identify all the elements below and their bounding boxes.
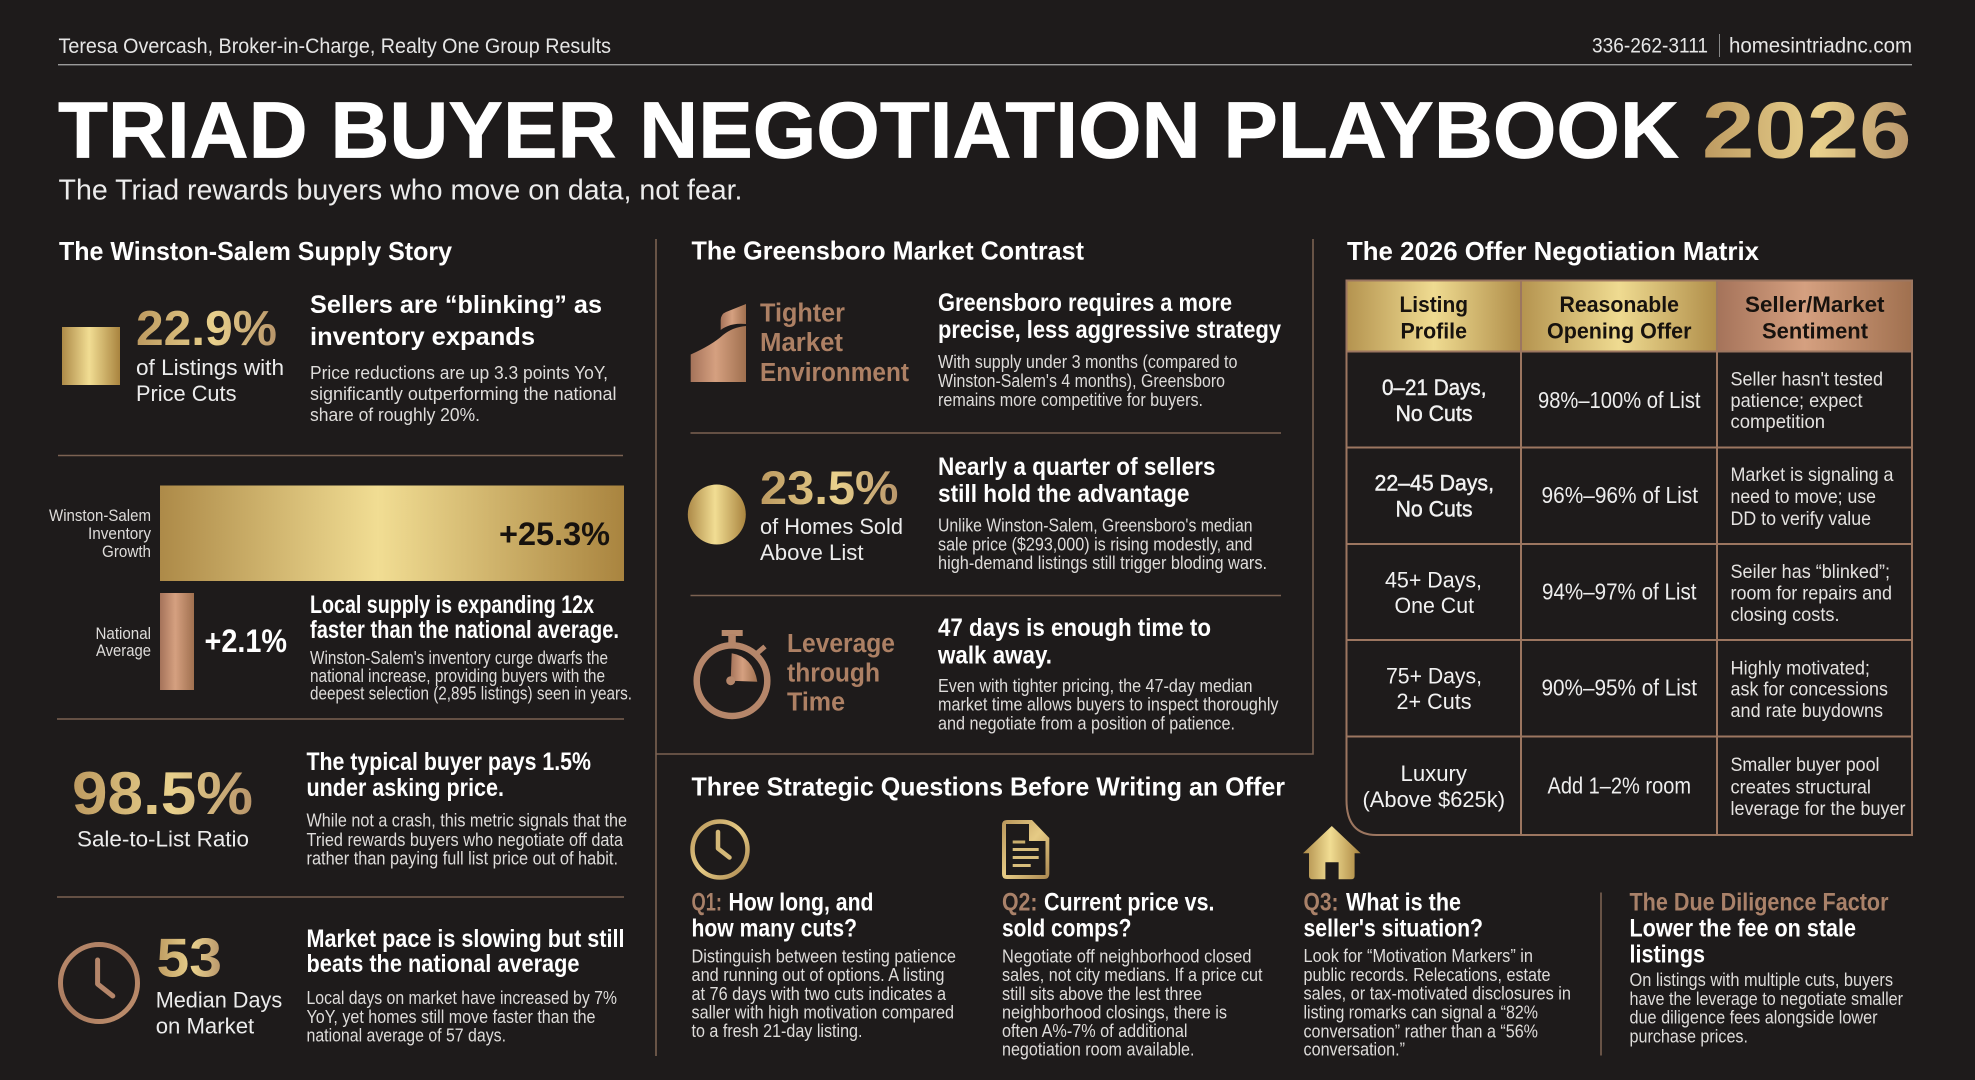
panel: Greensboro contrast <box>688 236 1281 734</box>
text block: Q1: and running out of options. A listing <box>692 964 944 985</box>
table header: Opening Offer <box>1547 318 1692 344</box>
heading: Greensboro: The Greensboro Market Contrast <box>692 236 1084 266</box>
title: 2026 <box>1702 86 1912 174</box>
text block: local supply <box>310 591 632 704</box>
text block: Q3: sales, or tax-motivated disclosures in <box>1304 982 1571 1004</box>
stat: median days: 53 <box>156 926 222 988</box>
text block: 47 days: and negotiate from a position of patience. <box>938 712 1235 734</box>
icon: gold circle <box>688 484 746 544</box>
text block: precise strategy: remains more competitive for buyers. <box>938 389 1203 410</box>
bar label: Winston-Salem: Inventory <box>88 524 151 543</box>
bar label: Winston-Salem: Growth <box>102 542 151 561</box>
icon: Q1 clock <box>692 822 748 878</box>
text block: sellers blinking: Sellers are “blinking” as <box>310 291 602 319</box>
text block: sellers blinking: Price reductions are up 3.3 points YoY, <box>310 362 608 383</box>
table header: Listing <box>1400 292 1468 317</box>
text block: Q1: How long, and <box>728 888 874 916</box>
text block: Q2: neighborhood closings, there is <box>1002 1002 1227 1022</box>
callout: tighter market: Tighter <box>760 300 845 328</box>
text block: local supply: deepest selection (2,895 listings) seen in years. <box>310 682 632 704</box>
text block: Q3 <box>1304 888 1571 1060</box>
table row: 0-21 days <box>1382 368 1883 433</box>
text block: precise strategy: precise, less aggressive strategy <box>938 316 1281 344</box>
panel: Winston-Salem supply story <box>49 236 632 1046</box>
stat: above list: Above List <box>760 540 864 565</box>
stat: price cuts: of Listings with <box>136 355 284 380</box>
icon: rising building <box>691 304 746 382</box>
table row: 75+ days: and rate buydowns <box>1730 700 1883 722</box>
table row: 45+ days: closing costs. <box>1730 604 1840 626</box>
text block: market pace <box>306 925 624 1046</box>
table row: 0-21 days: competition <box>1730 411 1825 433</box>
text block: Q3: What is the <box>1346 888 1461 916</box>
text block: Q3: public records. Relecations, estate <box>1304 964 1550 985</box>
stat: above list <box>760 461 903 565</box>
text block: Q3: conversation.” <box>1304 1038 1405 1060</box>
text block: Q3: conversation” rather than a “56% <box>1304 1020 1538 1042</box>
icon: gold square <box>62 327 120 385</box>
text block: precise strategy: With supply under 3 months (compared to <box>938 351 1238 372</box>
text block: Q1 <box>692 888 956 1041</box>
table row: 45+ days: room for repairs and <box>1730 582 1892 604</box>
text block: Q2: negotiation room available. <box>1002 1038 1194 1060</box>
stat: median days: Median Days <box>156 988 282 1012</box>
text block: Q1: Distinguish between testing patience <box>692 946 956 966</box>
icon: stopwatch <box>697 630 767 716</box>
table row: 45+ days: Seiler has “blinked”; <box>1730 561 1890 583</box>
text block: 47 days: Even with tighter pricing, the 47-day median <box>938 675 1252 696</box>
bar chart: inventory growth <box>49 486 624 690</box>
table row: 75+ days: 2+ Cuts <box>1396 689 1472 714</box>
bar: Winston-Salem +25.3%: +25.3% <box>499 516 610 552</box>
callout: due diligence factor: listings <box>1630 940 1705 968</box>
table header: Reasonable <box>1560 292 1679 317</box>
text block: typical buyer: rather than paying full list price out of habit. <box>306 848 618 868</box>
bar label: national: Average <box>96 641 151 660</box>
table row: 22-45 days: 22–45 Days, <box>1374 470 1494 496</box>
stat: sale-to-list: 98.5% <box>72 760 253 827</box>
text block: typical buyer: Tried rewards buyers who negotiate off data <box>306 829 624 850</box>
text block: quarter of sellers: still hold the advantage <box>938 480 1190 508</box>
text block: local supply: national increase, providing buyers with the <box>310 665 605 686</box>
callout: due diligence factor: The Due Diligence Factor <box>1630 888 1889 916</box>
table header: Profile <box>1400 318 1467 344</box>
table row: 22-45 days <box>1374 464 1894 530</box>
heading: matrix: The 2026 Offer Negotiation Matrix <box>1347 236 1760 266</box>
icon: Q2 document <box>1002 820 1049 879</box>
table row: 0-21 days: Seller hasn't tested <box>1730 368 1883 390</box>
table row: 22-45 days: need to move; use <box>1730 486 1876 508</box>
text block: market pace: Market pace is slowing but still <box>306 925 624 953</box>
stat: median days: on Market <box>156 1014 255 1038</box>
text block: market pace: Local days on market have increased by 7% <box>306 987 617 1008</box>
header bar: homesintriadnc.com <box>1729 34 1912 58</box>
text block: sellers blinking: inventory expands <box>310 323 535 351</box>
text block: Q3: listing romarks can signal a “82% <box>1304 1002 1538 1022</box>
table row: luxury: Smaller buyer pool <box>1730 754 1880 776</box>
stat: sale-to-list <box>72 760 253 852</box>
text block: Q3: seller's situation? <box>1304 914 1483 942</box>
stat: above list: 23.5% <box>760 461 898 514</box>
text block: quarter of sellers: Nearly a quarter of sellers <box>938 453 1216 481</box>
table row: 45+ days: One Cut <box>1394 593 1475 618</box>
text block: Q2: Negotiate off neighborhood closed <box>1002 946 1252 966</box>
table row: 75+ days: 75+ Days, <box>1386 664 1482 688</box>
text block: Q3: Q3: <box>1304 888 1338 916</box>
callout: tighter market: Market <box>760 329 844 357</box>
text block: sellers blinking <box>310 291 616 425</box>
table row: luxury: creates structural <box>1730 776 1871 798</box>
table row: 0-21 days: 0–21 Days, <box>1382 375 1486 400</box>
stat: price cuts: Price Cuts <box>136 381 236 406</box>
text block: quarter of sellers: high-demand listings still trigger bloding wars. <box>938 552 1267 573</box>
text block: local supply: Winston-Salem's inventory curge dwarfs the <box>310 647 608 668</box>
heading: Winston-Salem: The Winston-Salem Supply Story <box>59 236 453 266</box>
callout: leverage through time: Time <box>787 688 845 716</box>
text block: Q2 <box>1002 888 1262 1060</box>
callout: tighter market: Environment <box>760 359 909 387</box>
subtitle: The Triad rewards buyers who move on data, not fear. <box>58 174 742 206</box>
table row: 75+ days <box>1386 658 1888 722</box>
text block: sellers blinking: significantly outperforming the national <box>310 383 616 404</box>
table row: 75+ days: 90%–95% of List <box>1542 674 1698 700</box>
table row: luxury: Luxury <box>1400 761 1468 786</box>
text block: 47 days: market time allows buyers to inspect thoroughly <box>938 694 1279 714</box>
text block: Q2: often A%-7% of additional <box>1002 1020 1188 1041</box>
table grid <box>1346 280 1912 835</box>
text block: quarter of sellers: Unlike Winston-Salem, Greensboro's median <box>938 514 1252 536</box>
callout: due diligence factor: Lower the fee on stale <box>1630 914 1856 942</box>
text block: quarter of sellers: sale price ($293,000) is rising modestly, and <box>938 534 1252 554</box>
text block: Q1: at 76 days with two cuts indicates a <box>692 983 947 1004</box>
column frame lines <box>656 239 1313 1056</box>
callout: due diligence factor: have the leverage to negotiate smaller <box>1630 988 1903 1009</box>
table header: Seller/Market <box>1745 292 1885 317</box>
stat: price cuts <box>62 302 284 406</box>
text block: Q2: Q2: <box>1002 888 1038 916</box>
callout: due diligence factor: On listings with multiple cuts, buyers <box>1630 969 1893 990</box>
text block: Q2: sales, not city medians. If a price cut <box>1002 964 1262 985</box>
callout: leverage through time <box>787 630 895 716</box>
text block: precise strategy <box>938 289 1281 410</box>
text block: Q1: to a fresh 21-day listing. <box>692 1020 862 1041</box>
text block: typical buyer: The typical buyer pays 1.5% <box>306 748 591 776</box>
text block: 47 days: walk away. <box>937 642 1052 670</box>
text block: precise strategy: Winston-Salem's 4 months), Greensboro <box>938 370 1225 391</box>
bar: Winston-Salem +25.3% <box>160 486 624 581</box>
text block: Q1: Q1: <box>692 888 722 916</box>
text block: 47 days <box>937 614 1279 734</box>
table row: 45+ days <box>1385 561 1892 626</box>
table row: 45+ days: 94%–97% of List <box>1542 578 1697 604</box>
text block: Q2: Current price vs. <box>1044 888 1214 916</box>
header bar: 336-262-3111 <box>1592 34 1708 58</box>
bar label: national <box>96 624 151 660</box>
callout: due diligence factor: purchase prices. <box>1630 1026 1748 1046</box>
text block: Q1: saller with high motivation compared <box>692 1002 954 1022</box>
title: TRIAD BUYER NEGOTIATION PLAYBOOK <box>58 86 1679 174</box>
table row: 0-21 days: 98%–100% of List <box>1538 387 1701 413</box>
callout: leverage through time: through <box>787 660 880 688</box>
bar label: national: National <box>96 624 151 643</box>
text block: sellers blinking: share of roughly 20%. <box>310 404 480 425</box>
stat: sale-to-list: Sale-to-List Ratio <box>77 826 249 852</box>
text block: local supply: faster than the national average. <box>310 616 619 644</box>
text block: market pace: national average of 57 days. <box>306 1024 506 1046</box>
table row: 0-21 days: patience; expect <box>1730 390 1863 412</box>
table row: luxury: Add 1–2% room <box>1548 772 1691 798</box>
callout: due diligence factor <box>1630 888 1903 1046</box>
table row: 22-45 days: No Cuts <box>1396 496 1472 522</box>
callout: tighter market <box>760 300 909 387</box>
text block: 47 days: 47 days is enough time to <box>938 614 1211 642</box>
table row: 45+ days: 45+ Days, <box>1385 568 1482 592</box>
table row: 22-45 days: DD to verify value <box>1730 508 1871 530</box>
header bar <box>58 34 1912 65</box>
stat: median days <box>156 926 282 1038</box>
bar label: Winston-Salem <box>49 506 151 561</box>
text block: market pace: YoY, yet homes still move faster than the <box>306 1006 596 1027</box>
icon: clock <box>60 944 138 1022</box>
bar: national +2.1%: +2.1% <box>204 623 287 659</box>
table header: Sentiment <box>1762 318 1868 344</box>
text block: typical buyer: under asking price. <box>306 774 504 802</box>
text block: typical buyer: While not a crash, this metric signals that the <box>306 810 627 830</box>
panel: three strategic questions <box>692 772 1903 1060</box>
table row: 22-45 days: 96%–96% of List <box>1542 482 1699 508</box>
stat: price cuts: 22.9% <box>136 302 277 356</box>
stat: above list: of Homes Sold <box>760 514 903 539</box>
header bar: Teresa Overcash, Broker-in-Charge, Realty One Group Results <box>58 34 611 58</box>
table row: luxury: leverage for the buyer <box>1730 798 1906 820</box>
text block: Q2: still sits above the lest three <box>1002 983 1202 1004</box>
text block: typical buyer <box>306 748 627 868</box>
text block: precise strategy: Greensboro requires a more <box>938 289 1232 317</box>
callout: leverage through time: Leverage <box>787 630 895 658</box>
panel: offer negotiation matrix <box>1346 236 1912 835</box>
heading: questions: Three Strategic Questions Before Writing an Offer <box>692 772 1285 802</box>
callout: due diligence factor: due diligence fees alongside lower <box>1630 1006 1878 1028</box>
table row: 75+ days: ask for concessions <box>1730 678 1888 700</box>
text block: Q3: Look for “Motivation Markers” in <box>1304 945 1533 966</box>
text block: quarter of sellers <box>938 453 1267 573</box>
table row: 22-45 days: Market is signaling a <box>1730 464 1894 486</box>
table row: 0-21 days: No Cuts <box>1396 401 1472 426</box>
bar: national +2.1% <box>160 593 287 690</box>
table row: luxury: (Above $625k) <box>1362 787 1505 812</box>
text block: local supply: Local supply is expanding 12x <box>310 591 594 619</box>
bar label: Winston-Salem: Winston-Salem <box>49 506 151 525</box>
table row: luxury <box>1362 754 1906 820</box>
table header <box>1346 280 1912 352</box>
icon: Q3 house <box>1303 826 1361 879</box>
table row: 75+ days: Highly motivated; <box>1730 658 1870 680</box>
text block: Q1: how many cuts? <box>692 914 857 942</box>
text block: Q2: sold comps? <box>1002 914 1132 942</box>
text block: market pace: beats the national average <box>306 950 580 978</box>
